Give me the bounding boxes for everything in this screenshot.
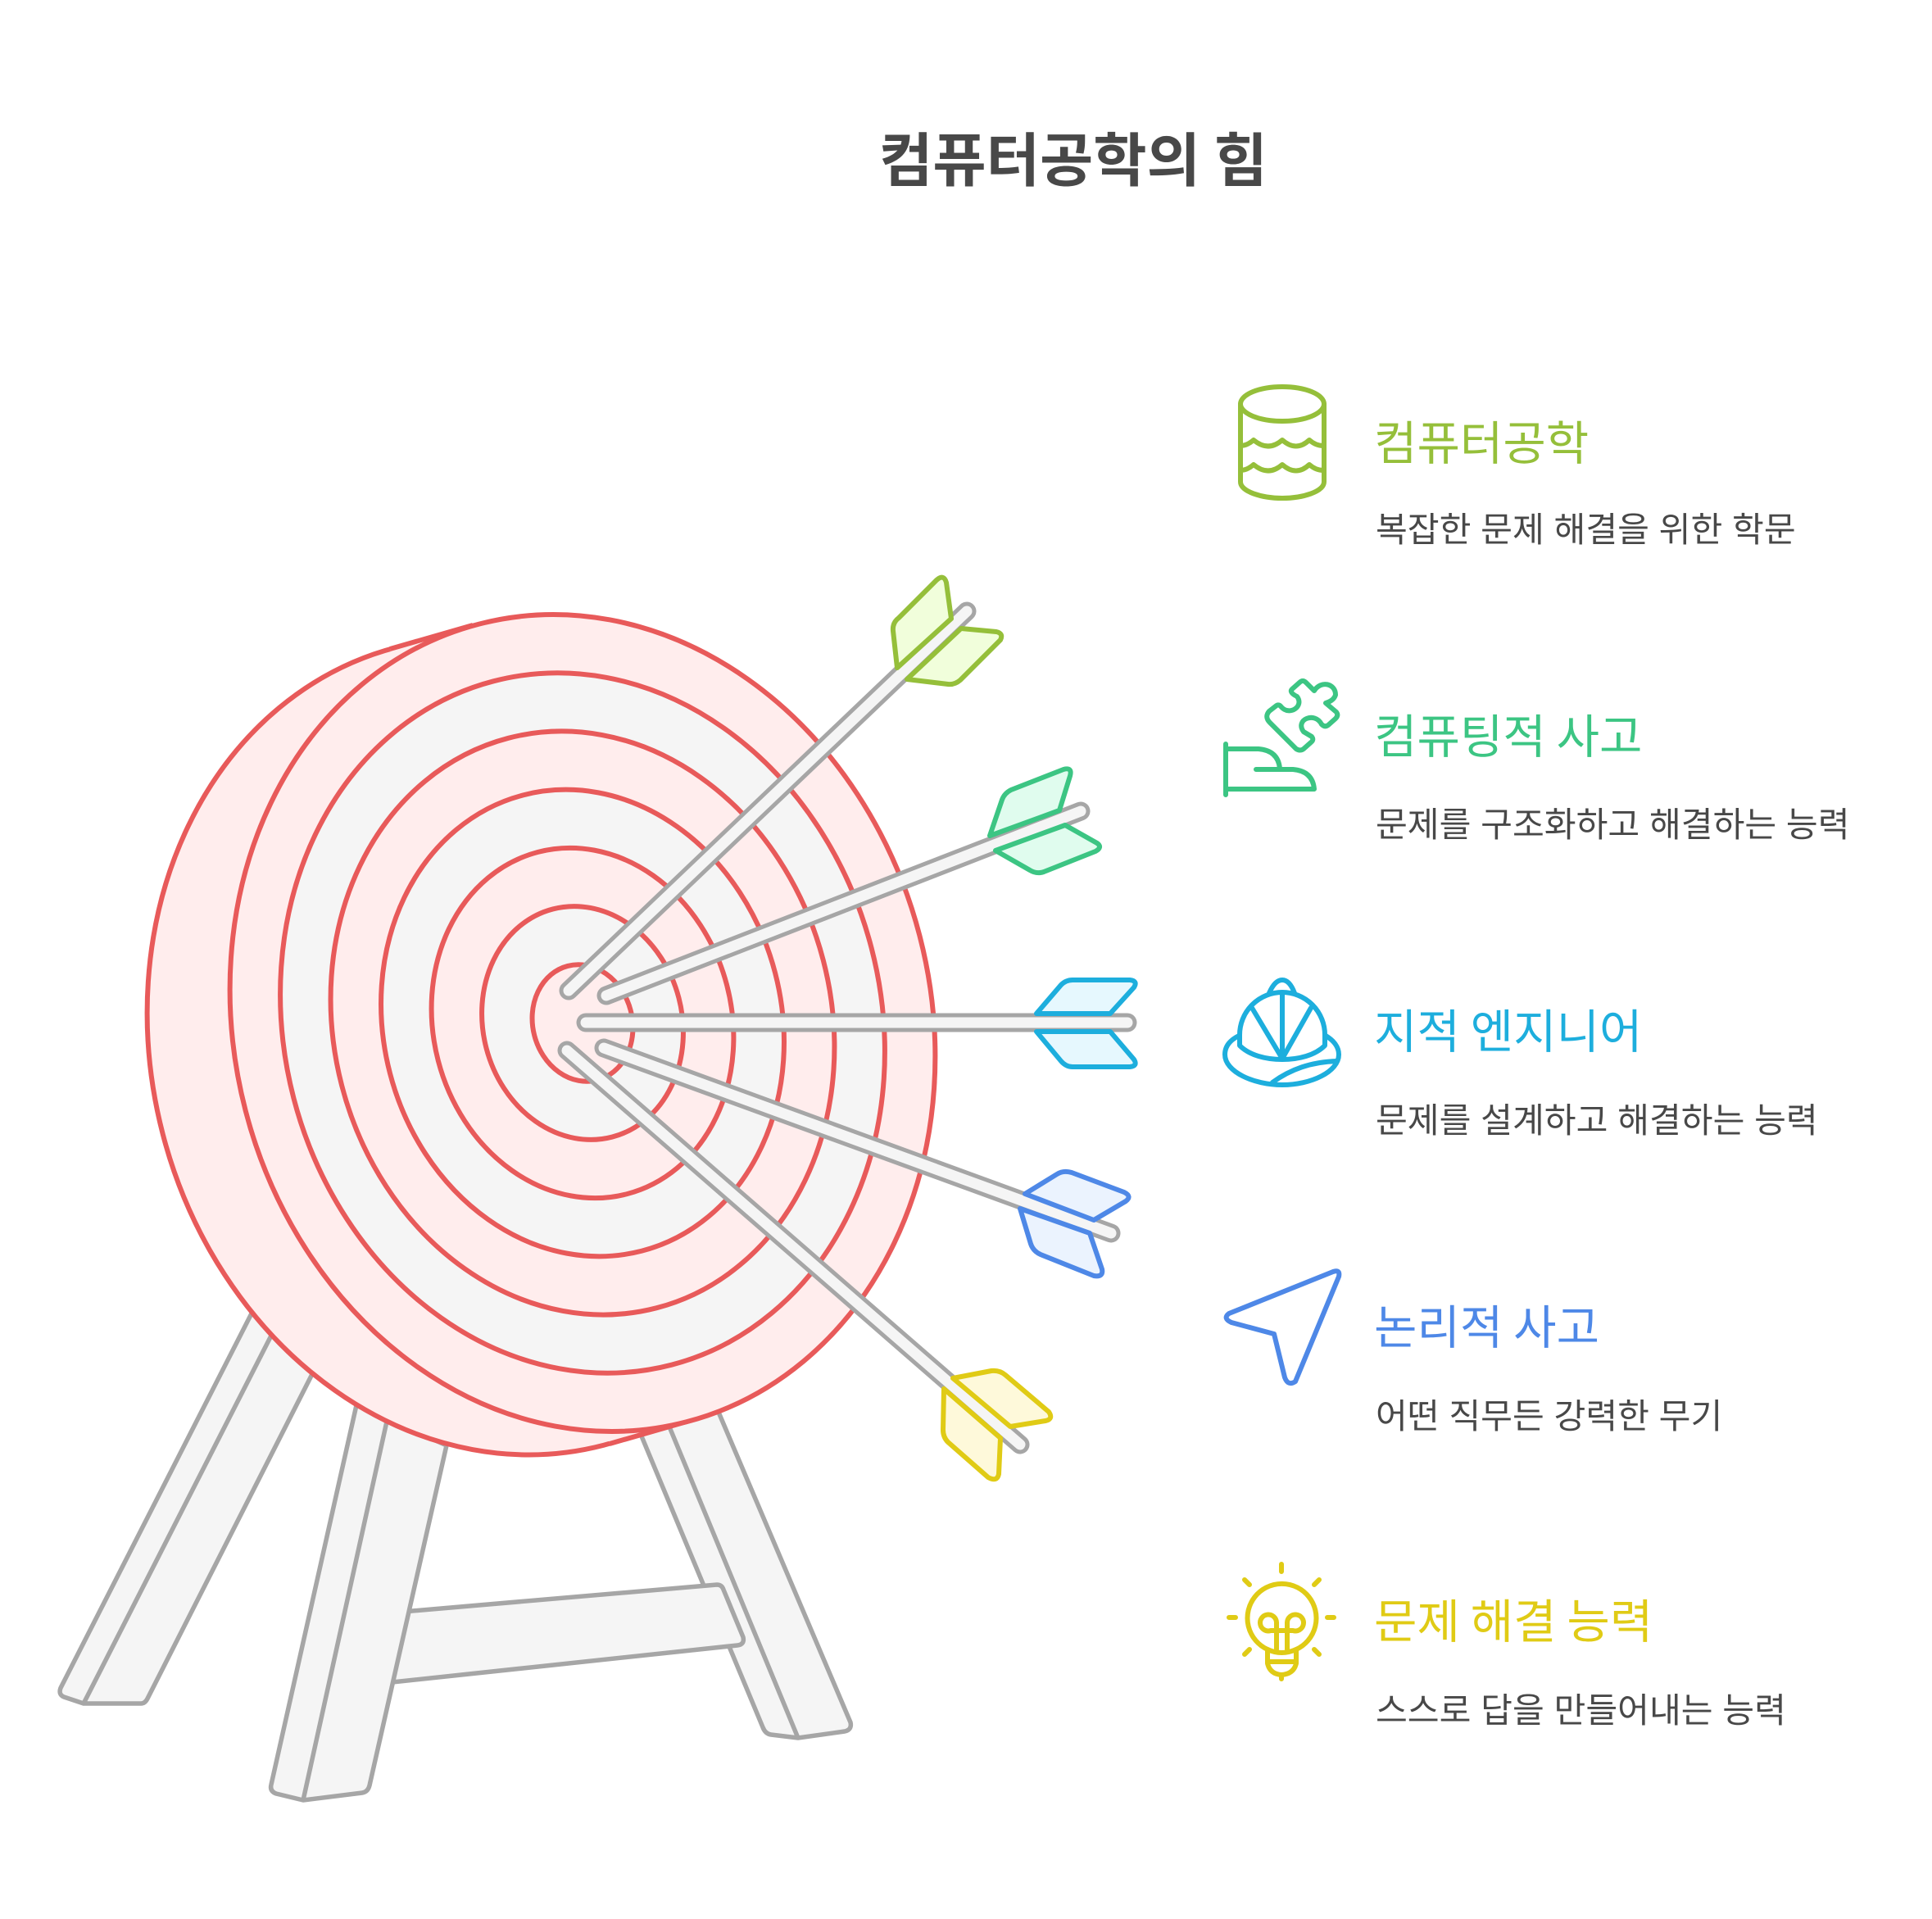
heading: computational thinking: 컴퓨팅적 사고 (1374, 711, 1642, 764)
icon: database cylinder (1240, 387, 1324, 498)
heading: intellectual engineer: 지적 엔지니어 (1374, 1006, 1642, 1059)
arrow 5: yellow (567, 1050, 1050, 1479)
target concentric rings (142, 537, 1023, 1509)
icon: hard hat (1225, 980, 1339, 1085)
icon: light bulb (1229, 1564, 1334, 1679)
middle leg (271, 1405, 447, 1800)
title: 컴퓨터공학의 힘 (879, 129, 1268, 194)
description: logical thinking: 어떤 직무든 강력한 무기 (1376, 1397, 1722, 1436)
arrow 1: olive (569, 578, 1001, 991)
arrow 2: green (606, 769, 1100, 996)
heading: computer engineering: 컴퓨터공학 (1374, 418, 1589, 470)
illustration: target stand legs (60, 1312, 850, 1800)
description: computer engineering: 복잡한 문제 해결을 위한 학문 (1376, 510, 1796, 549)
arrow 4: blue (604, 1048, 1129, 1276)
icon: hand with puzzle piece (1226, 681, 1337, 795)
icon: navigation pointer (1227, 1271, 1339, 1383)
target side depth (59, 560, 941, 1533)
description: computational thinking: 문제를 구조화하고 해결하는 능력 (1376, 805, 1850, 844)
heading: logical thinking: 논리적 사고 (1374, 1302, 1599, 1354)
left leg (60, 1312, 313, 1704)
target board (59, 537, 1023, 1533)
description: problem solving ability: 스스로 답을 만들어내는 능력 (1376, 1691, 1786, 1730)
description: intellectual engineer: 문제를 설계하고 해결하는 능력 (1376, 1101, 1818, 1140)
arrow 3: cyan (586, 980, 1136, 1067)
right leg (624, 1393, 850, 1738)
heading: problem solving ability: 문제 해결 능력 (1374, 1596, 1653, 1649)
crossbar (377, 1585, 743, 1684)
